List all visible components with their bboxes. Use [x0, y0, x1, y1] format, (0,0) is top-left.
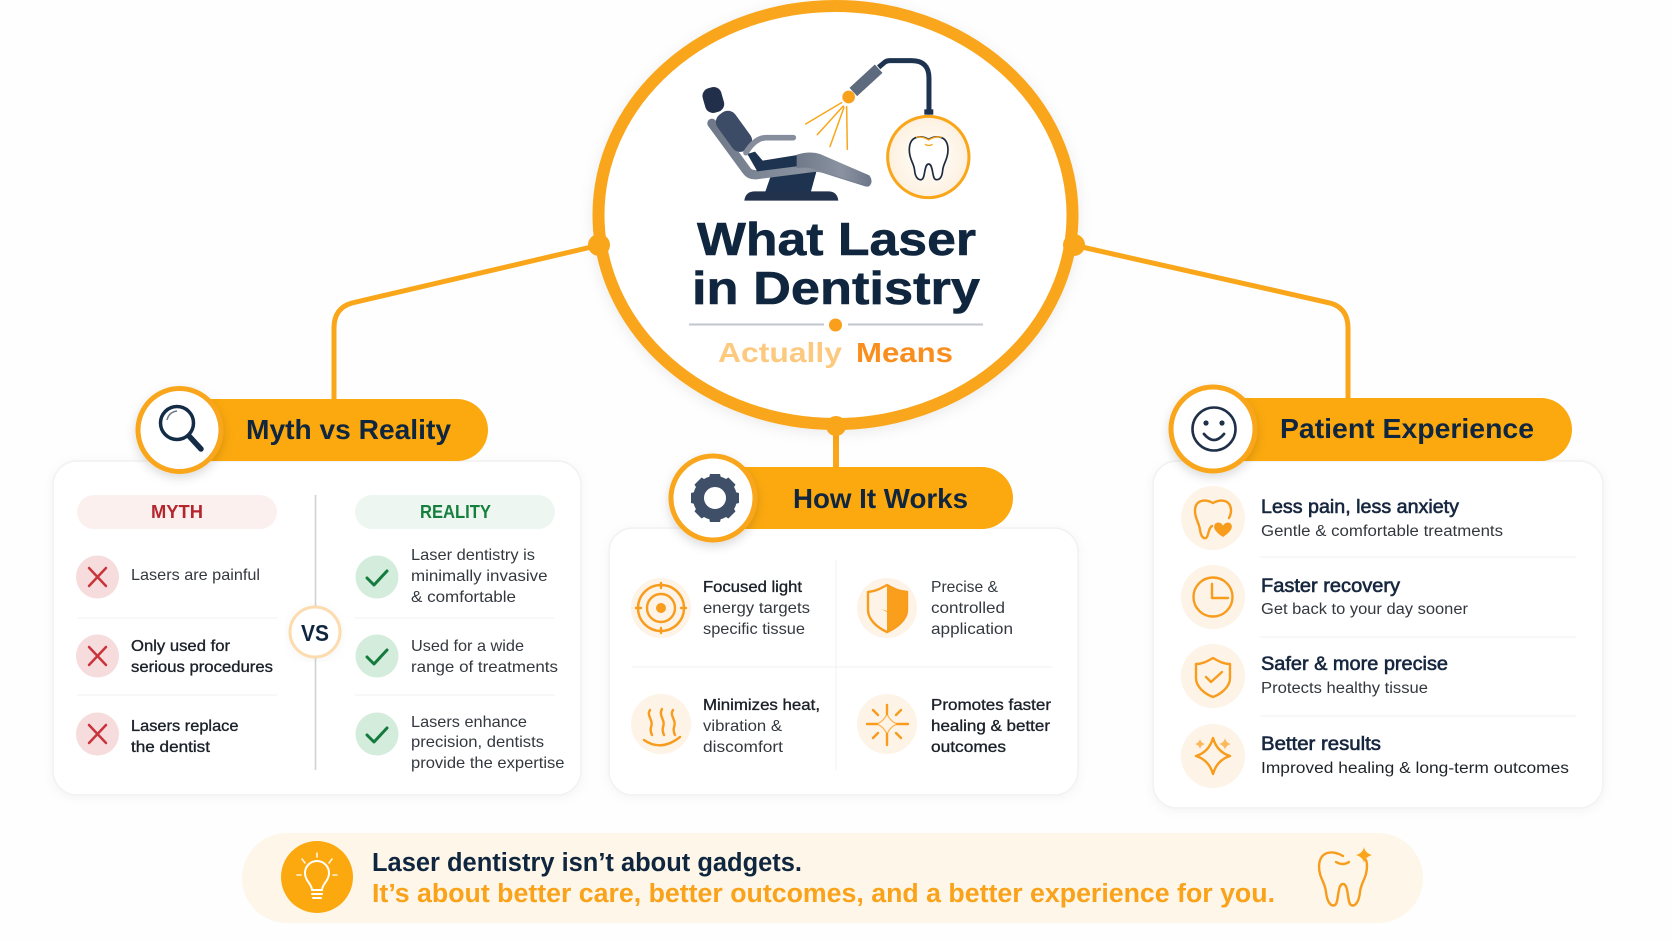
item: minimizes heat [631, 694, 820, 756]
VS badge [290, 607, 340, 657]
item: better results: Better results [1261, 734, 1381, 755]
chair seat [747, 152, 799, 171]
icon: smiley [1171, 387, 1255, 471]
subtitle [718, 337, 953, 368]
item: less pain: Gentle & comfortable treatments [1261, 523, 1503, 540]
myth item 3: Lasers replace [131, 718, 239, 735]
reality item 3 [356, 712, 565, 772]
chair base [744, 171, 838, 201]
title: in Dentistry [692, 262, 980, 314]
hub node left [588, 234, 610, 256]
banner text: Laser dentistry isn’t about gadgets. [372, 849, 802, 877]
myth item 2: Only used for [131, 638, 231, 655]
reality item 3: Lasers enhance [411, 714, 527, 731]
reality item 1: minimally invasive [411, 568, 548, 585]
hub node bottom [826, 416, 846, 436]
item: safer and more precise [1181, 644, 1448, 708]
myth item 2: serious procedures [131, 659, 273, 676]
icon: light bulb [281, 841, 353, 913]
item: better results [1181, 724, 1569, 788]
chair back frame and leg rest [712, 123, 867, 182]
title [692, 213, 980, 314]
item: focused light [631, 578, 810, 638]
myth header: MYTH [151, 502, 203, 522]
hub node right [1063, 234, 1085, 256]
item: less pain: Less pain, less anxiety [1261, 497, 1460, 518]
chair headrest [701, 85, 726, 115]
item: faster recovery: Faster recovery [1261, 576, 1401, 597]
chair leg rest upper [797, 152, 871, 187]
myth item 3 [76, 712, 239, 756]
reality item 1 [356, 547, 548, 606]
item: promotes faster healing: outcomes [931, 739, 1006, 756]
icon: tooth in circle [888, 116, 969, 198]
VS badge: VS [301, 620, 329, 646]
reality item 2: range of treatments [411, 659, 558, 676]
item: focused light: specific tissue [703, 621, 805, 638]
heading pill: Patient Experience [1220, 398, 1572, 461]
myth item 2 [76, 634, 273, 678]
heading pill: How It Works [720, 467, 1013, 529]
laser tip [842, 91, 855, 103]
laser arm [879, 61, 929, 112]
item: focused light: Focused light [703, 579, 803, 596]
reality item 3: provide the expertise [411, 755, 565, 772]
item: faster recovery [1181, 565, 1468, 629]
chair backrest [712, 107, 756, 156]
banner text [372, 849, 1275, 908]
title: What Laser [697, 213, 976, 265]
laser rays [806, 103, 847, 149]
item: precise and controlled: controlled [931, 600, 1005, 617]
title divider [689, 318, 983, 332]
myth item 3: the dentist [131, 739, 211, 756]
icon: sparkling tooth [1319, 847, 1372, 905]
icon: magnifying glass [138, 388, 221, 472]
reality item 1: Laser dentistry is [411, 547, 535, 564]
laser handpiece [853, 69, 879, 92]
connector: hub to Myth vs Reality [334, 245, 600, 402]
central hub circle [588, 6, 1085, 436]
myth item 1: Lasers are painful [131, 567, 260, 584]
heading pill: Myth vs Reality: Myth vs Reality [246, 414, 451, 445]
illustration: dental chair and laser [701, 61, 969, 201]
item: promotes faster healing [857, 694, 1052, 756]
subtitle: Actually [718, 337, 842, 368]
item: better results: Improved healing & long-term outcomes [1261, 760, 1569, 777]
item: focused light: energy targets [703, 600, 810, 617]
item: precise and controlled [857, 578, 1013, 638]
myth header [77, 495, 277, 529]
item: safer and more precise: Protects healthy tissue [1261, 680, 1428, 697]
icon: gear [671, 456, 755, 540]
chair armrest [746, 138, 793, 153]
heading pill: Patient Experience: Patient Experience [1280, 413, 1534, 444]
reality header: REALITY [420, 502, 491, 522]
item: safer and more precise: Safer & more precise [1261, 654, 1448, 675]
item: precise and controlled: Precise & [931, 579, 998, 596]
panel: Myth vs Reality [53, 388, 581, 795]
subtitle: Means [856, 337, 953, 368]
item: precise and controlled: application [931, 621, 1013, 638]
heading pill: How It Works: How It Works [793, 483, 968, 514]
myth item 1 [76, 556, 260, 598]
laser connector [924, 109, 933, 130]
reality item 3: precision, dentists [411, 734, 544, 751]
banner: takeaway [242, 833, 1423, 923]
item: minimizes heat: vibration & [703, 718, 782, 735]
connector: hub to How It Works [833, 428, 839, 470]
panel: Patient Experience [1153, 387, 1603, 808]
banner text: It’s about better care, better outcomes, and a better experience for you. [372, 880, 1275, 908]
item: minimizes heat: Minimizes heat, [703, 697, 820, 714]
reality header [355, 495, 555, 529]
heading pill: Myth vs Reality [190, 399, 488, 461]
reality item 2: Used for a wide [411, 638, 524, 655]
item: less pain [1181, 486, 1503, 550]
item: promotes faster healing: Promotes faster [931, 697, 1052, 714]
item: minimizes heat: discomfort [703, 739, 784, 756]
panel: How It Works [609, 456, 1078, 795]
item: promotes faster healing: healing & better [931, 718, 1051, 735]
reality item 2 [356, 634, 558, 678]
reality item 1: & comfortable [411, 589, 516, 606]
connector: hub to Patient Experience [1073, 245, 1348, 402]
item: faster recovery: Get back to your day sooner [1261, 601, 1468, 618]
